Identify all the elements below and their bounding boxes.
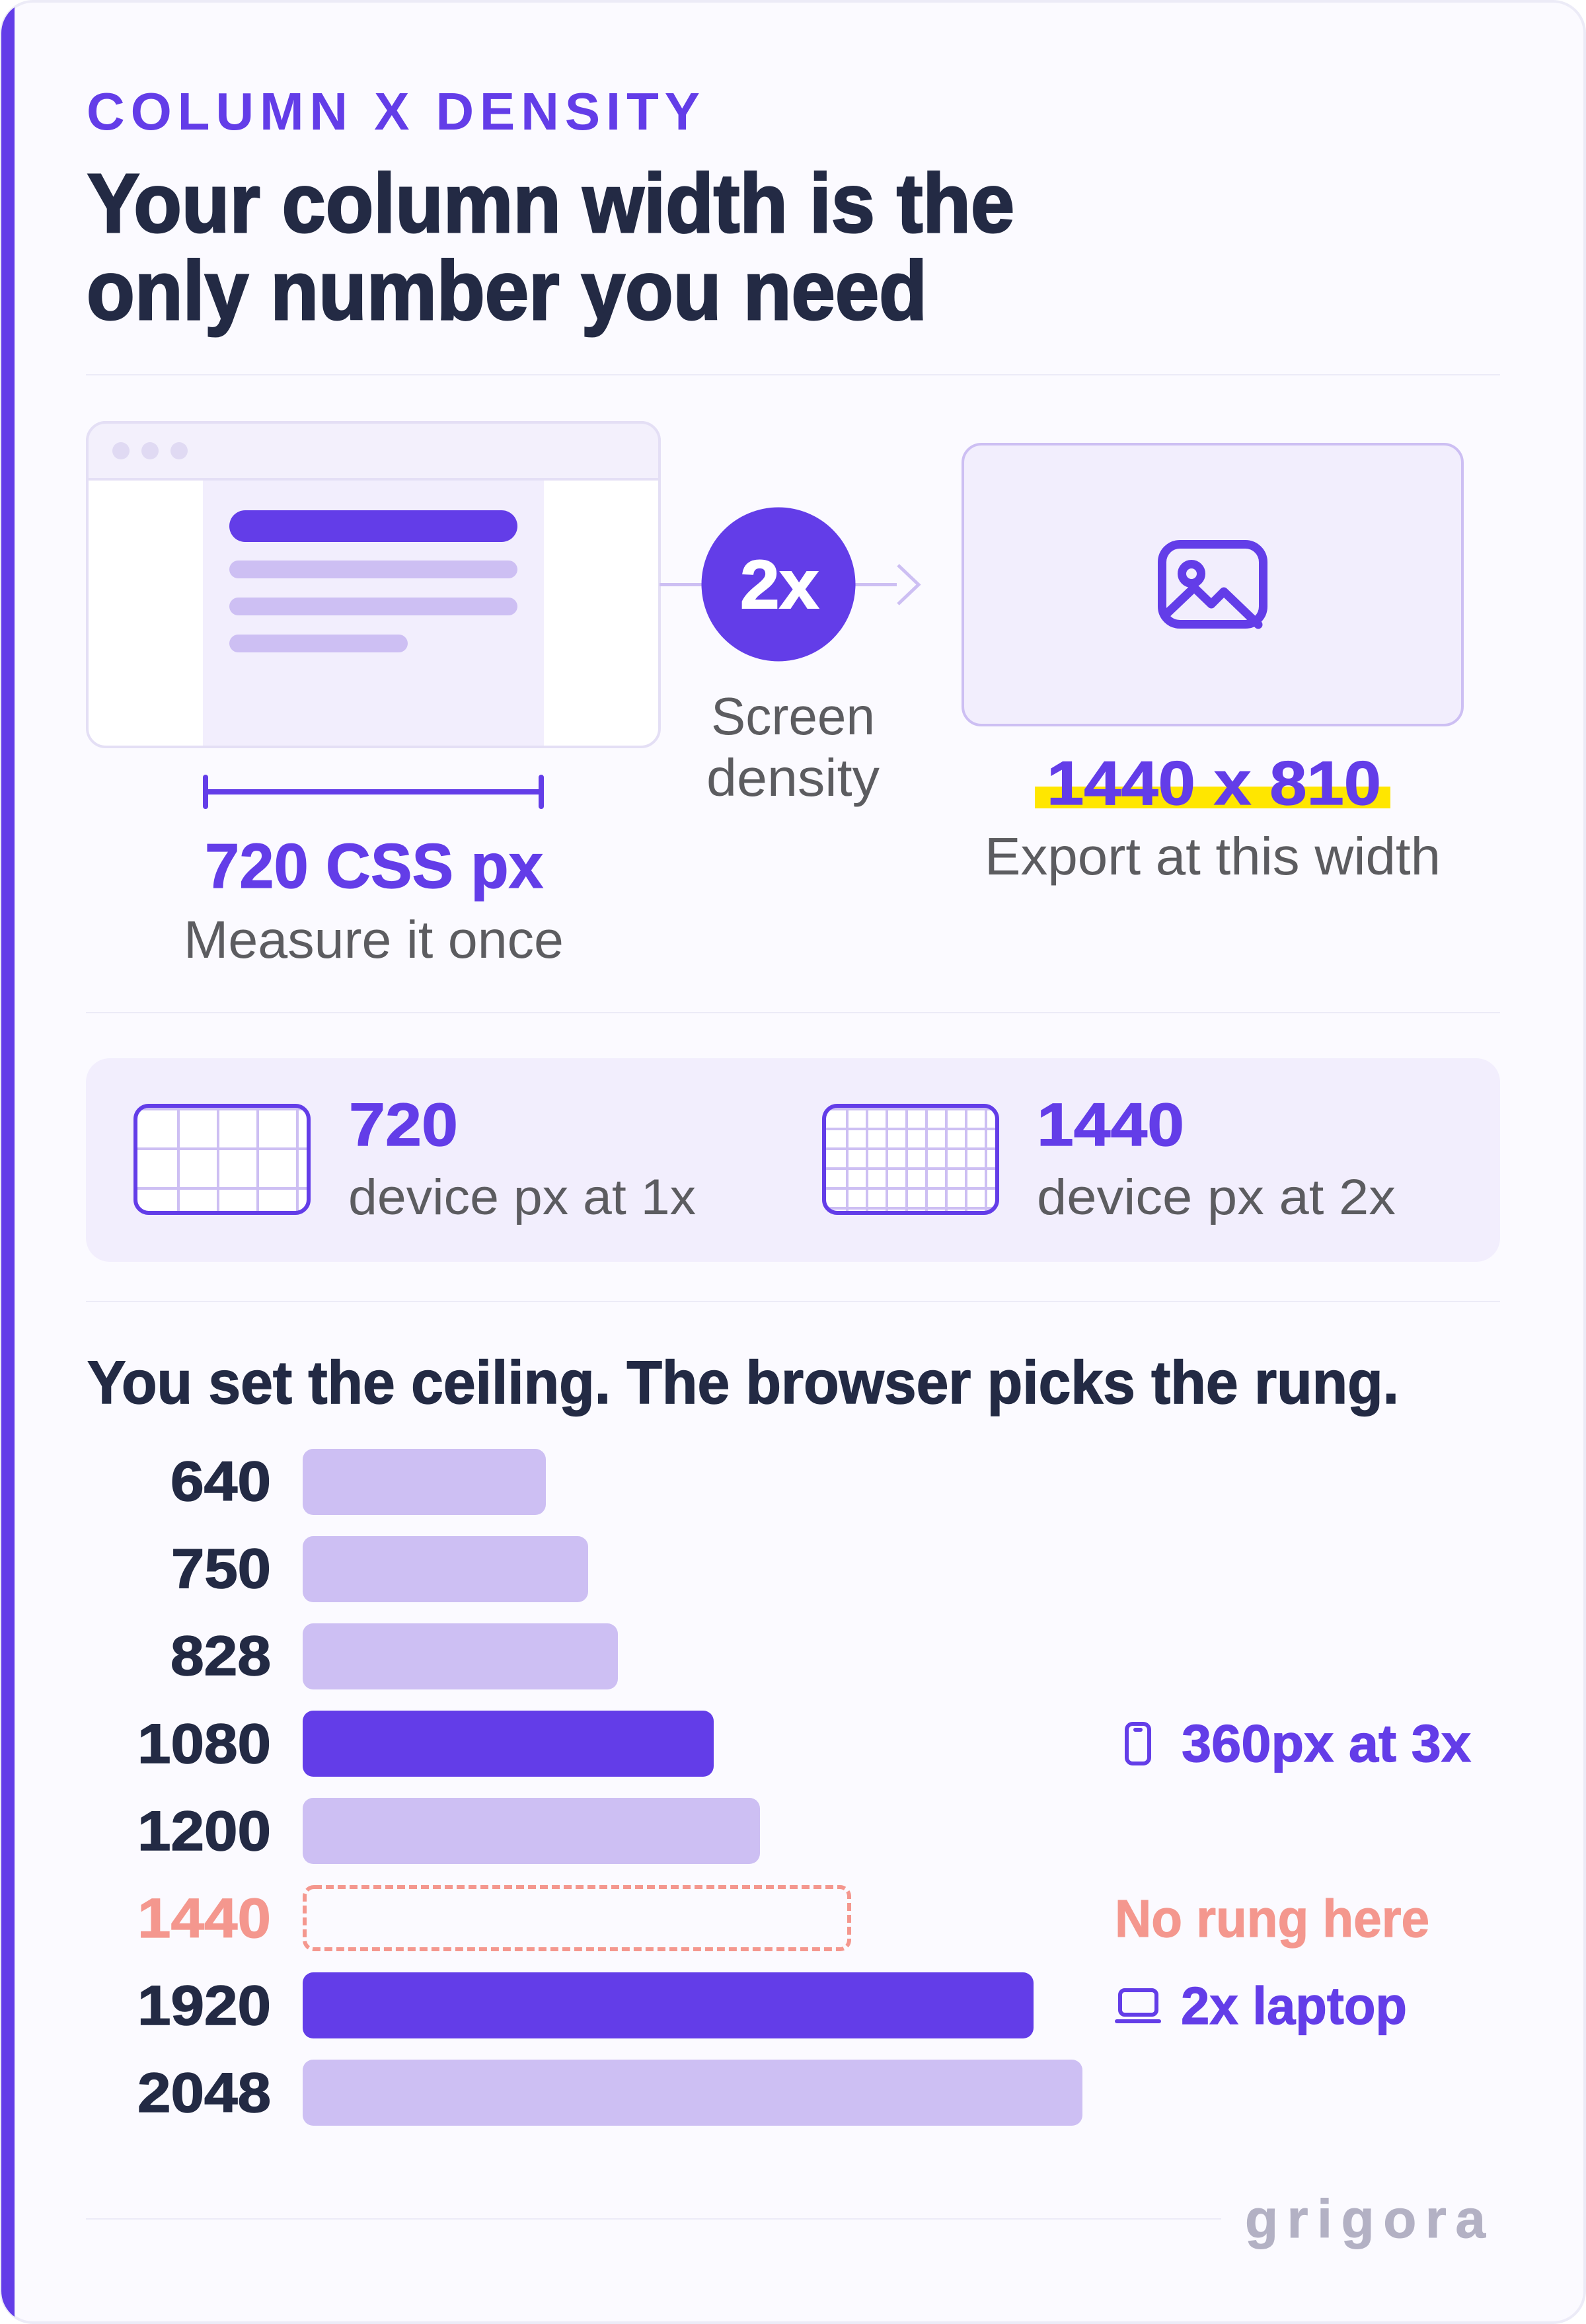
density badge: 2x xyxy=(740,547,819,623)
stat: 1440: device px at 2x xyxy=(1037,1169,1396,1225)
density badge xyxy=(702,508,855,661)
label: 2x laptop: 2x laptop xyxy=(1181,1976,1407,2035)
brand wordmark: grigora xyxy=(1245,2189,1486,2249)
export size label: 1440 x 810 xyxy=(1047,748,1381,818)
rung 828: 828 xyxy=(170,1625,271,1687)
density caption: density xyxy=(706,748,880,807)
export caption: Export at this width xyxy=(985,827,1441,886)
rung 1200 xyxy=(137,1798,760,1864)
rung 1440 missing xyxy=(137,1887,849,1949)
export image box xyxy=(963,444,1462,725)
stat: 1440 xyxy=(1037,1091,1396,1225)
title xyxy=(87,157,1014,337)
content column xyxy=(203,481,544,746)
rung 750: 750 xyxy=(171,1537,271,1600)
stat: 720 xyxy=(348,1091,696,1225)
density caption xyxy=(706,687,880,807)
rung 1080: 1080 xyxy=(137,1713,271,1775)
title: Your column width is the xyxy=(87,157,1014,250)
density caption: Screen xyxy=(711,687,875,746)
column width label: 720 CSS px xyxy=(205,831,543,902)
window dots xyxy=(112,442,188,459)
highlight xyxy=(1035,787,1390,808)
label: 360px at 3x: 360px at 3x xyxy=(1182,1714,1471,1773)
arrow to export xyxy=(854,565,919,604)
bar chart: srcset rungs xyxy=(137,1449,1082,2126)
icon: image xyxy=(1162,545,1264,625)
rung 1080 xyxy=(137,1711,714,1777)
icon: 1x grid xyxy=(132,1104,311,1215)
rung 640: 640 xyxy=(170,1450,271,1512)
label: no rung here: No rung here xyxy=(1115,1889,1429,1948)
stat: 1440: 1440 xyxy=(1037,1091,1184,1159)
stat: 720: 720 xyxy=(349,1091,458,1159)
headline bar xyxy=(229,510,517,542)
column width caption: Measure it once xyxy=(184,910,564,969)
rung 828 xyxy=(170,1623,618,1689)
rung 2048 xyxy=(137,2060,1082,2126)
connector line left xyxy=(660,583,703,586)
width ruler xyxy=(206,777,541,806)
eyebrow: COLUMN X DENSITY xyxy=(87,82,700,141)
text lines xyxy=(229,561,517,652)
title: only number you need xyxy=(87,244,927,337)
rung 640 xyxy=(170,1449,546,1515)
rung 1920: 1920 xyxy=(137,1974,271,2036)
icon: phone xyxy=(1127,1724,1149,1763)
rung 750 xyxy=(171,1536,588,1602)
rung 1440 missing: 1440 xyxy=(137,1887,271,1949)
browser mockup xyxy=(87,422,660,747)
rung 2048: 2048 xyxy=(137,2062,271,2124)
panel: device pixels xyxy=(86,1058,1500,1262)
rung 1200: 1200 xyxy=(137,1800,271,1862)
left accent bar xyxy=(1,0,15,2324)
icon: laptop xyxy=(1117,1990,1159,2021)
icon: 2x grid xyxy=(819,1104,998,1215)
rung 1920 xyxy=(137,1972,1034,2038)
stat: 720: device px at 1x xyxy=(348,1169,696,1225)
chart heading: You set the ceiling. The browser picks the rung. xyxy=(87,1349,1399,1416)
browser title bar xyxy=(87,422,660,479)
